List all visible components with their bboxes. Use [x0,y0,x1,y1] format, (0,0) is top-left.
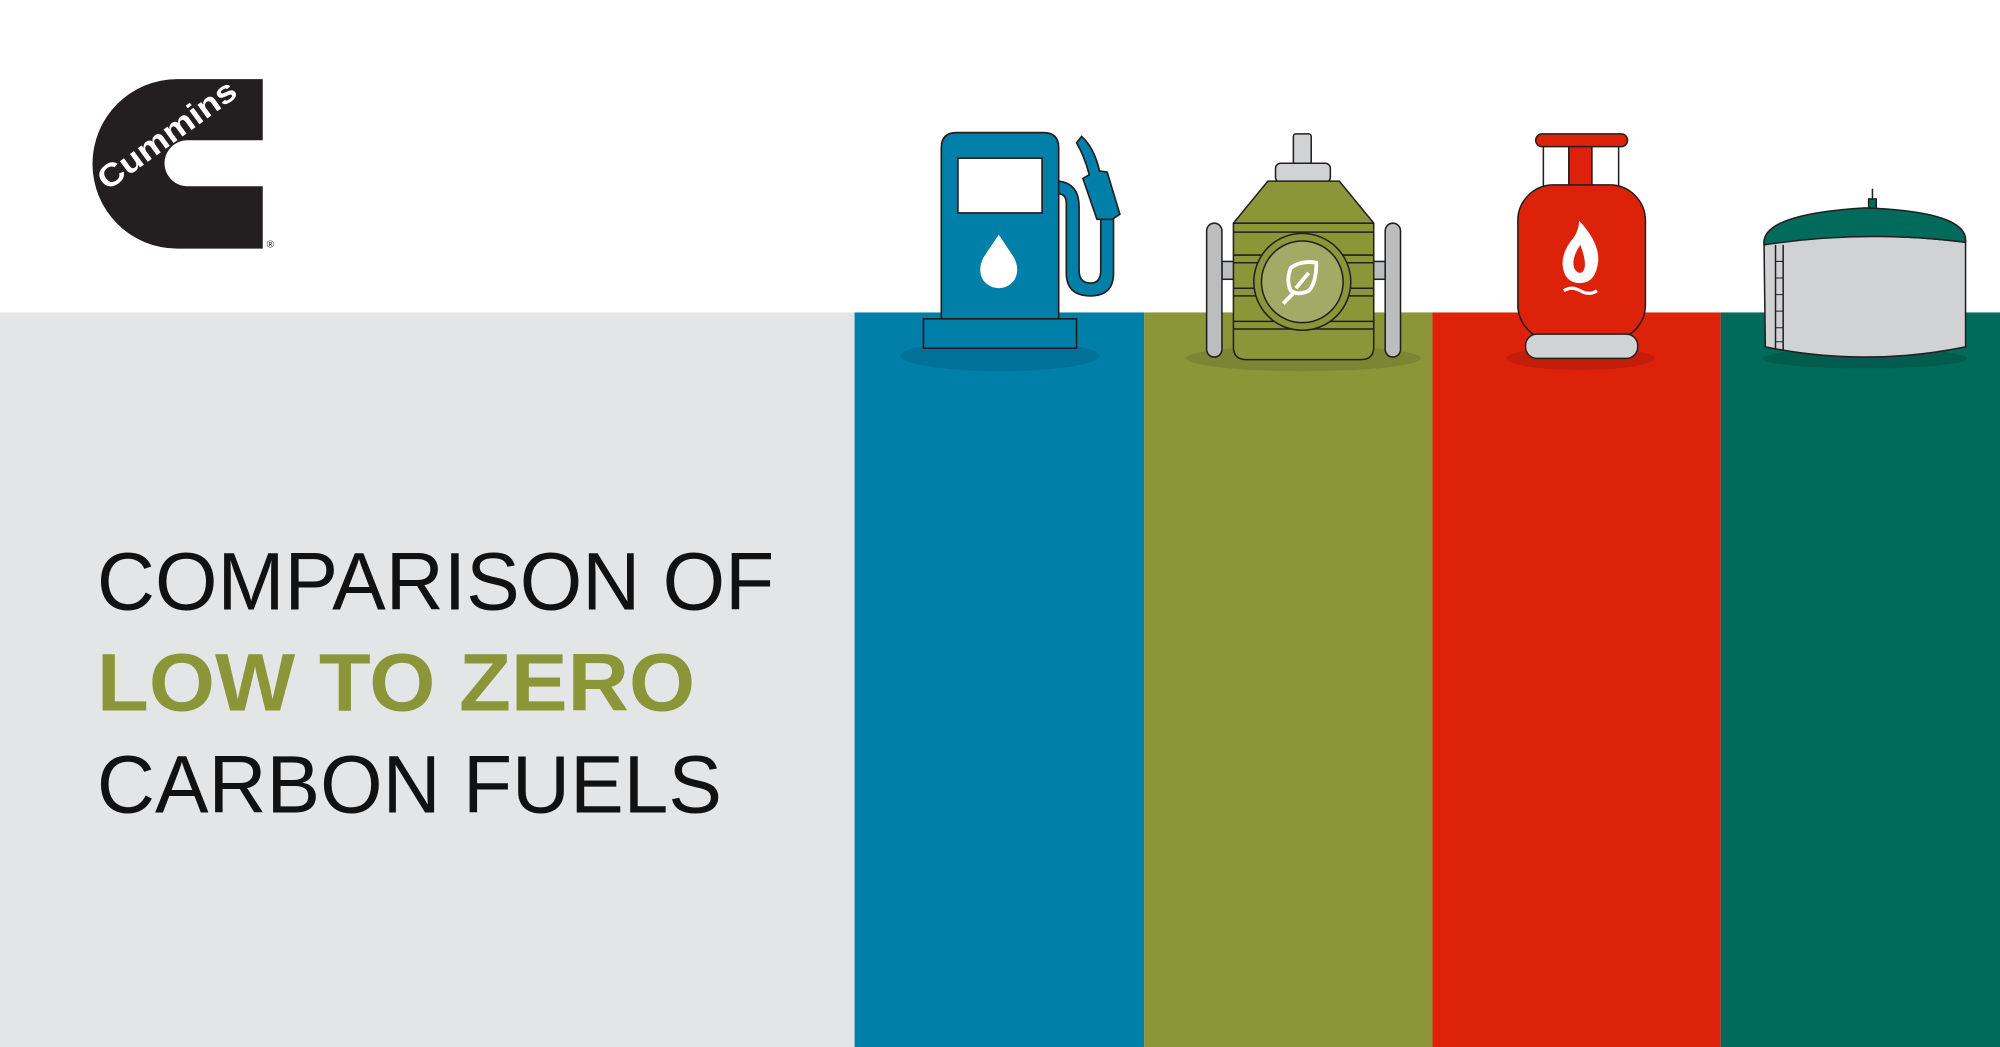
icon: fuel pump [901,133,1120,371]
panel: left gray [0,312,855,1047]
icon: biogas tank [1186,134,1421,371]
title [97,537,774,830]
panel: blue column [855,312,1144,1047]
panel: green column [1721,312,2000,1047]
title: COMPARISON OF [97,537,774,628]
panel: red column [1432,312,1721,1047]
logo: Cummins: ® [267,239,275,250]
panel: olive column [1144,312,1432,1047]
title: CARBON FUELS [97,739,722,830]
title: LOW TO ZERO [97,637,695,728]
icon: gas cylinder [1506,134,1654,370]
logo: Cummins: Cummins [90,72,243,197]
icon: storage tank [1763,189,1967,369]
logo: Cummins [90,72,275,250]
